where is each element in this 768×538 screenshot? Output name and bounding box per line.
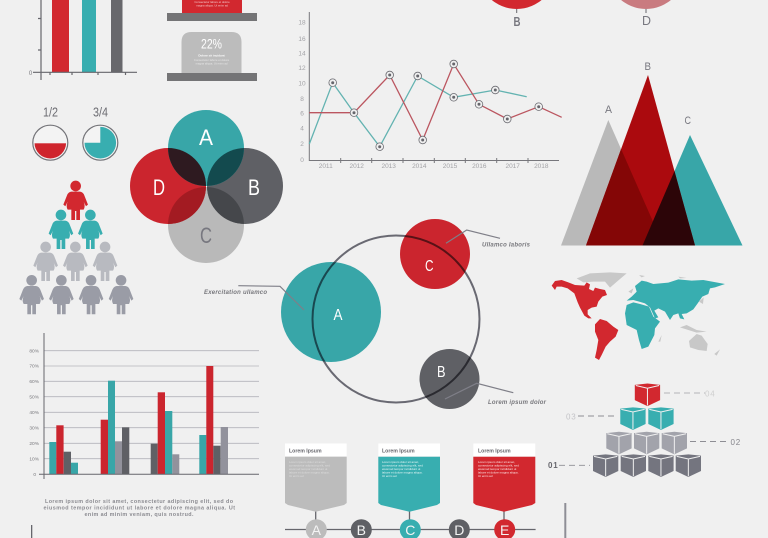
card A: labore et dolore magna aliqua. [289,470,330,474]
leader lines [238,230,513,399]
podium: grey stat card: magna aliqua. Ut enim ad [196,62,228,66]
fraction: one half: 1/2 [43,106,58,120]
y axis labels: 30% [29,426,40,432]
card A: eiusmod tempor incididunt ut [289,467,328,471]
card E: labore et dolore magna aliqua. [478,470,519,474]
y axis labels: 80% [29,348,40,354]
data markers [329,60,542,151]
callout labels [204,242,547,406]
circle letters: C [425,258,434,275]
card C [378,444,440,522]
card A: Ut enim ad [289,474,304,478]
callout labels: Lorem ipsum dolor [488,400,547,406]
triangle labels [605,61,691,127]
y axis labels: 10% [29,456,40,462]
x axis labels: 2011 [319,163,333,170]
venn diagram [130,110,283,263]
y axis labels: 4 [300,126,304,132]
card C: consectetur adipiscing elit, sed [382,464,423,468]
podium: grey stat card: Dolore sit incidunt [198,54,225,58]
y axis labels: 10 [298,80,306,88]
cube level labels: 01 [548,461,558,470]
card C: eiusmod tempor incididunt ut [382,467,421,471]
circle letters [334,258,446,381]
card A: consectetur adipiscing elit, sed [289,464,330,468]
caption text: eiusmod tempor incididunt ut labore et dolore magna aliqua. Ut [44,506,235,512]
y axis labels [298,20,306,164]
card C: Lorem Ipsum [382,448,415,454]
y axis labels: 6 [300,110,304,118]
triangle labels: B [644,61,651,73]
podium: grey stat card: Consectetur labore et dolore [194,58,230,62]
y axis labels: 60% [29,379,40,385]
x axis labels: 2012 [349,163,364,170]
caption text [44,499,235,518]
triangle chart [561,61,742,246]
x axis labels: 2015 [443,163,458,170]
cube level labels: 03 [566,412,576,422]
card A [285,444,347,522]
stat value: 22% [201,36,222,52]
node letters: C [405,522,415,538]
bar chart: top left [29,0,137,80]
circle letters: B [437,364,446,381]
cube level labels [548,390,741,470]
top partial circle D [607,0,685,28]
y axis labels: 40% [29,410,40,416]
node letters [312,522,509,538]
decorative cut-off vertical bar left [31,525,32,538]
top partial circle D: D [642,13,651,28]
fraction: three quarters [83,106,118,160]
y axis labels: 8 [300,96,304,103]
red series [309,64,562,140]
y axis labels: 2 [300,141,304,148]
caption text: Lorem ipsum dolor sit amet, consectetur adipiscing elit, sed do [45,499,234,505]
x axis labels: 2016 [472,163,487,170]
y axis labels: 16 [298,36,306,43]
x axis labels [319,163,549,170]
venn labels: C [200,223,212,248]
y axis labels: 70% [29,364,40,370]
fraction: three quarters: 3/4 [93,106,108,120]
map: americas [552,272,627,360]
podium: red stat card [167,0,257,21]
cut-off vertical bar right [564,503,566,538]
cube pyramid [548,384,741,477]
cube dashed connectors [559,393,730,465]
timeline axis [285,528,536,530]
top partial circle B [478,0,556,29]
y axis labels: 12 [298,65,306,72]
podium: red stat card: Consectetur labore et dolore [194,0,230,4]
node letters: D [454,522,464,538]
grouped bar chart [29,333,259,479]
card E: Lorem ipsum dolor sit amet, [478,460,515,464]
y axis labels: 0 [300,157,304,164]
bars [49,366,228,474]
card E: Lorem Ipsum [478,448,511,454]
card C: labore et dolore magna aliqua. [382,470,423,474]
y axis labels: 50% [29,394,40,400]
caption text: enim ad minim veniam, quis nostrud. [84,512,194,518]
triangle labels: C [684,115,691,127]
callout labels: Ullamco laboris [482,242,531,248]
top partial circle B: B [514,14,520,29]
circle B [420,349,480,409]
world map [552,272,725,360]
timeline [285,444,536,538]
circle C [400,219,470,289]
line chart [298,12,562,170]
card C: Ut enim ad [382,474,397,478]
grid lines [44,351,259,459]
card E: Ut enim ad [478,474,493,478]
large ring [312,236,480,402]
venn labels: B [248,175,260,200]
cube level labels: 02 [730,438,741,447]
podium: grey stat card [167,32,257,81]
y axis labels [29,348,40,478]
node letters: A [312,522,322,538]
callout labels: Exercitation ullamco [204,290,267,296]
podium: red stat card: magna aliqua. Ut enim ad [196,4,228,8]
triangle labels: A [605,104,613,116]
timeline nodes [306,519,515,538]
teal series [309,76,527,147]
x axis labels: 2013 [381,163,396,170]
x axis labels: 2018 [534,163,549,170]
x axis labels: 2017 [505,163,520,170]
card A: Lorem ipsum dolor sit amet, [289,460,326,464]
y axis labels: 20% [29,441,40,447]
card E: eiusmod tempor incididunt ut [478,467,517,471]
venn labels: D [153,175,165,200]
cube level labels: 04 [705,390,716,398]
circle A [281,262,381,362]
venn labels [153,125,260,248]
map: old world [625,275,725,356]
card E [473,444,535,522]
node letters: B [357,522,366,538]
axes [39,333,259,479]
people pyramid [19,181,133,314]
card A: Lorem Ipsum [289,448,322,454]
fraction: one half [32,107,68,161]
ring diagram [204,219,547,409]
y axis labels: 0 [33,472,36,478]
venn labels: A [199,125,213,150]
y axis labels: 14 [298,50,306,58]
bar chart: top left: 0 [29,71,33,77]
node letters: E [500,522,509,538]
card C: Lorem ipsum dolor sit amet, [382,460,419,464]
y axis labels: 18 [298,20,306,26]
circle letters: A [334,307,343,324]
x axis labels: 2014 [412,163,427,170]
card E: consectetur adipiscing elit, sed [478,464,519,468]
